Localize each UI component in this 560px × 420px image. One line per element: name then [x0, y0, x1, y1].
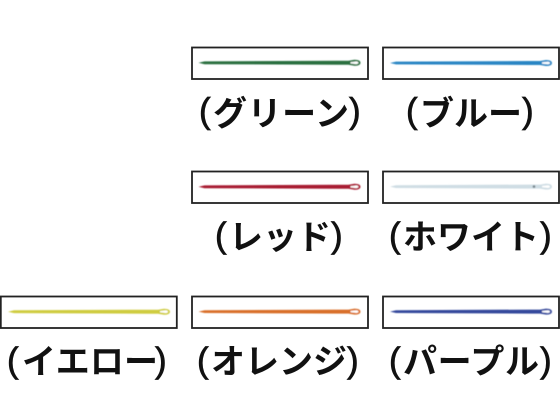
label: purple: パープル [403, 344, 539, 382]
label: yellow: ) [155, 341, 167, 380]
panel: yellow swatch [1, 296, 177, 328]
label: white: ( [389, 216, 401, 255]
label: green: グリーン [213, 96, 349, 134]
panel: red swatch [192, 172, 368, 203]
label: purple: ) [540, 341, 552, 380]
label: red: ) [331, 216, 343, 255]
label: blue: ブルー [420, 94, 522, 134]
panel: purple swatch [383, 296, 559, 328]
label: green: ( [199, 92, 211, 130]
panel: orange swatch [192, 296, 368, 328]
panel: blue swatch [383, 48, 559, 79]
label: red: レッド [229, 219, 331, 257]
label: orange: オレンジ [211, 344, 347, 382]
label: white: ホワイト [403, 219, 539, 257]
label: white: ) [540, 216, 552, 255]
label: orange: ( [197, 341, 209, 380]
label: yellow: ( [7, 341, 19, 380]
label: orange: ) [347, 341, 359, 380]
label: purple: ( [389, 341, 401, 380]
label: green: ) [349, 92, 361, 130]
panel: white swatch [383, 172, 559, 203]
label: yellow: イエロー [22, 344, 158, 382]
panel: green swatch [192, 48, 368, 79]
label: blue: ( [406, 92, 418, 130]
label: red: ( [215, 216, 227, 255]
label: blue: ) [522, 92, 534, 130]
